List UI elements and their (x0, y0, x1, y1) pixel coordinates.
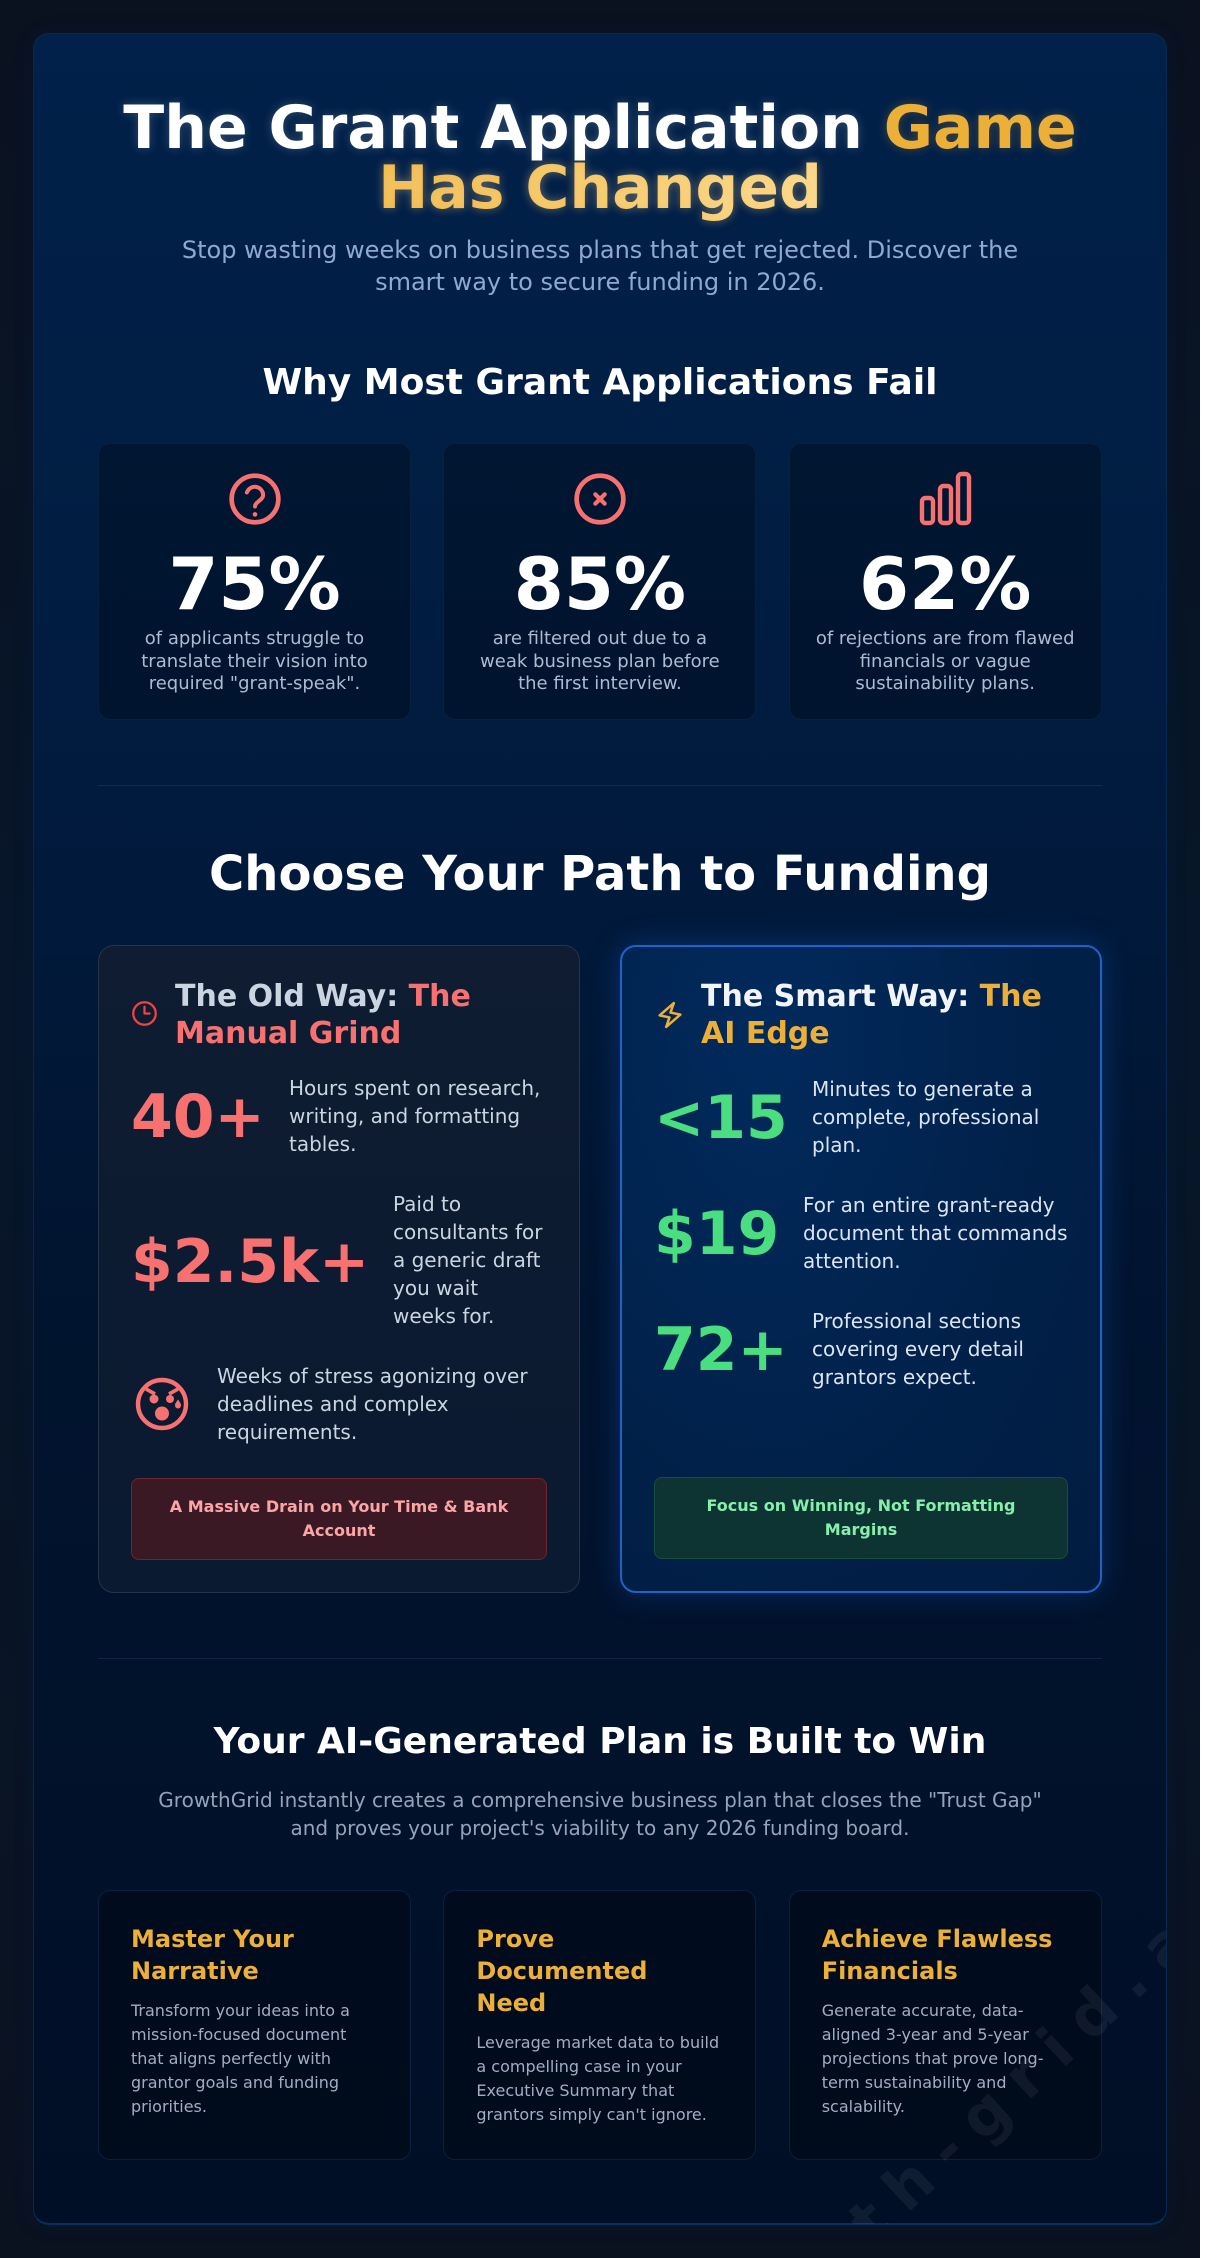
callout: massive drain (131, 1478, 547, 1560)
metric description: complete, professional (812, 1105, 1039, 1129)
metric description: a generic draft (393, 1248, 540, 1272)
metric value: $19 (654, 1199, 779, 1269)
smart way heading: The Smart Way: The (701, 979, 1042, 1014)
stat description (816, 628, 1075, 694)
feature description: projections that prove long- (822, 2049, 1043, 2068)
title: Has Changed (378, 153, 822, 223)
icon: clock (132, 1001, 157, 1026)
feature heading: Achieve Flawless (822, 1925, 1052, 1953)
feature description: Leverage market data to build (476, 2033, 719, 2052)
metric description (217, 1364, 528, 1444)
stat description: weak business plan before (480, 650, 720, 672)
section intro text: GrowthGrid instantly creates a comprehensive business plan that closes the "Trust Gap" (158, 1788, 1042, 1812)
feature description: aligned 3-year and 5-year (822, 2025, 1029, 2044)
feature description: mission-focused document (131, 2025, 346, 2044)
feature description (822, 2001, 1043, 2116)
metric description: For an entire grant-ready (803, 1193, 1055, 1217)
stat description: translate their vision into (141, 650, 368, 672)
feature heading (476, 1925, 647, 2017)
feature description: scalability. (822, 2097, 905, 2116)
old way heading: Manual Grind (175, 1016, 401, 1050)
feature heading: Need (476, 1989, 546, 2017)
heading: built to win: Your AI-Generated Plan is Built to Win (214, 1721, 986, 1762)
smart way heading (701, 979, 1042, 1050)
metric description: deadlines and complex (217, 1392, 449, 1416)
metric: weeks of stress (136, 1364, 528, 1444)
feature heading: Financials (822, 1957, 958, 1985)
stat description (141, 628, 368, 694)
stat description: of rejections are from flawed (816, 628, 1075, 649)
stat description (480, 628, 720, 694)
metric description: Hours spent on research, (289, 1076, 540, 1100)
stat description: are filtered out due to a (493, 628, 707, 649)
icon: x circle (574, 473, 626, 525)
metric description: requirements. (217, 1420, 357, 1444)
metric description (812, 1077, 1039, 1157)
panel: the old way (98, 945, 580, 1593)
metric value: 72+ (654, 1315, 788, 1385)
panel: stat 75% (98, 443, 411, 720)
title: The Grant Application Game (123, 93, 1077, 163)
panel: achieve flawless financials (789, 1890, 1102, 2160)
feature description: that aligns perfectly with (131, 2049, 331, 2068)
feature description: Transform your ideas into a (131, 2001, 350, 2020)
header (121, 93, 1078, 296)
metric description: Paid to (393, 1192, 461, 1216)
stat number: 62% (859, 542, 1031, 626)
heading: choose your path: Choose Your Path to Funding (209, 846, 991, 902)
feature description (130, 2001, 350, 2116)
metric description: Professional sections (812, 1309, 1021, 1333)
old way heading: The Old Way: The (175, 979, 471, 1014)
feature description: Generate accurate, data- (822, 2001, 1024, 2020)
metric description: writing, and formatting (289, 1104, 520, 1128)
stat description: sustainability plans. (855, 673, 1035, 694)
section intro text (158, 1788, 1042, 1840)
metric description: Minutes to generate a (812, 1077, 1033, 1101)
metric description (289, 1076, 540, 1156)
panel: stat 85% (443, 443, 756, 720)
panel: the smart way (620, 945, 1102, 1593)
stat number: 75% (168, 542, 341, 626)
metric value: <15 (654, 1083, 788, 1153)
metric description (812, 1309, 1024, 1389)
metric description: grantors expect. (812, 1365, 977, 1389)
metric value: $2.5k+ (131, 1227, 369, 1297)
feature description (476, 2033, 719, 2124)
panel: master your narrative (98, 1890, 411, 2160)
stat description: the first interview. (518, 673, 682, 694)
panel: stat 62% (789, 443, 1102, 720)
feature description: a compelling case in your (476, 2057, 682, 2076)
metric: 72+ sections (654, 1309, 1024, 1389)
metric description: document that commands (803, 1221, 1067, 1245)
feature heading: Narrative (131, 1957, 259, 1985)
metric description: plan. (812, 1133, 862, 1157)
subtitle (182, 236, 1018, 296)
feature heading (131, 1925, 294, 1985)
metric description: attention. (803, 1249, 901, 1273)
metric description: consultants for (393, 1220, 542, 1244)
smart way heading: AI Edge (701, 1016, 830, 1050)
callout: massive drain: Account (303, 1521, 375, 1540)
feature description: grantor goals and funding (131, 2073, 339, 2092)
feature heading: Documented (476, 1957, 647, 1985)
metric value: 40+ (131, 1082, 265, 1152)
metric description: tables. (289, 1132, 356, 1156)
metric description: Weeks of stress agonizing over (217, 1364, 528, 1388)
stat description: of applicants struggle to (145, 628, 364, 649)
metric: 40+ hours (131, 1076, 540, 1156)
icon: stressed face (136, 1378, 188, 1430)
callout: focus on winning: Focus on Winning, Not Formatting (707, 1496, 1015, 1515)
subtitle: Stop wasting weeks on business plans that get rejected. Discover the (182, 236, 1018, 264)
subtitle: smart way to secure funding in 2026. (375, 268, 825, 296)
metric description (803, 1193, 1067, 1273)
metric: under 15 minutes (654, 1077, 1039, 1157)
feature description: priorities. (131, 2097, 207, 2116)
feature description: grantors simply can't ignore. (476, 2105, 707, 2124)
stat number: 85% (514, 542, 686, 626)
old way heading (175, 979, 471, 1050)
icon: lightning bolt (658, 1002, 682, 1028)
callout: massive drain: A Massive Drain on Your Time & Bank (170, 1497, 508, 1516)
feature heading: Master Your (131, 1925, 294, 1953)
feature description: term sustainability and (822, 2073, 1006, 2092)
metric description: you wait (393, 1276, 478, 1300)
icon: bar chart (920, 472, 972, 526)
title (121, 93, 1078, 227)
metric: $19 (654, 1193, 1067, 1273)
feature heading: Prove (476, 1925, 554, 1953)
metric description: covering every detail (812, 1337, 1024, 1361)
icon: question circle (229, 473, 281, 525)
section intro text: and proves your project's viability to any 2026 funding board. (290, 1816, 909, 1840)
feature description: Executive Summary that (476, 2081, 674, 2100)
callout: focus on winning: Margins (825, 1520, 897, 1539)
callout: focus on winning (654, 1477, 1068, 1559)
metric description (393, 1192, 542, 1328)
metric: $2.5k+ consultants (131, 1192, 542, 1328)
heading: why applications fail: Why Most Grant Applications Fail (262, 362, 938, 403)
stat description: required "grant-speak". (149, 673, 360, 694)
stat description: financials or vague (860, 650, 1031, 672)
metric description: weeks for. (393, 1304, 494, 1328)
panel: prove documented need (443, 1890, 756, 2160)
feature heading (822, 1925, 1052, 1985)
